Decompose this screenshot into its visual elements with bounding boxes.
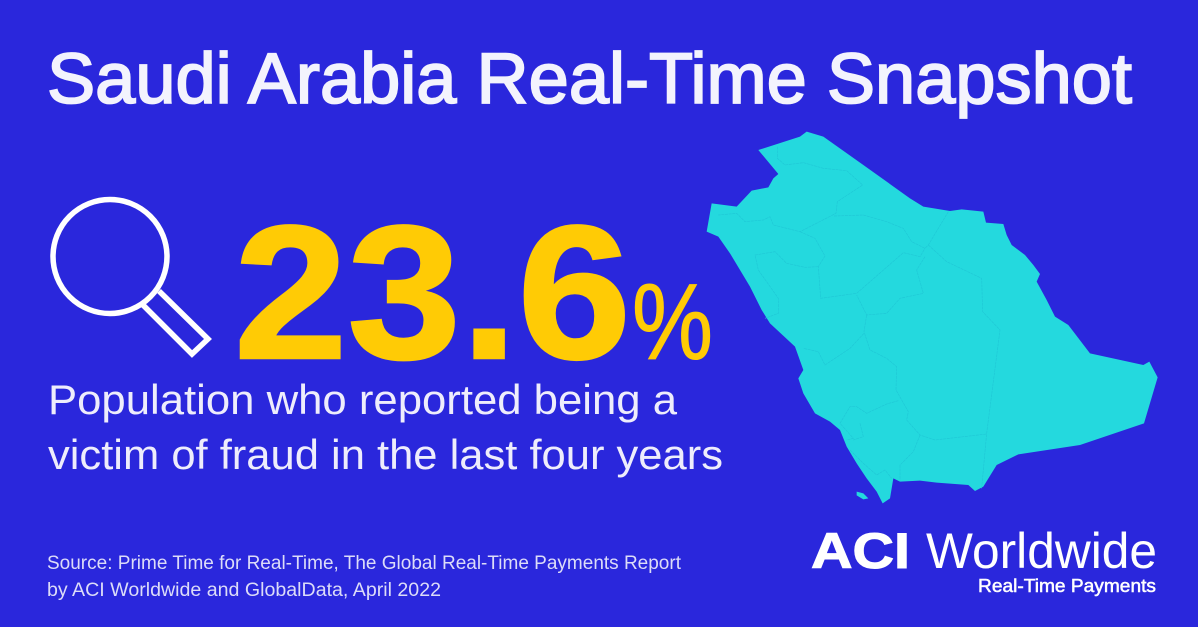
source note: Source: Prime Time for Real-Time, The Global Real-Time Payments Report: [47, 553, 682, 574]
description text: [48, 376, 723, 478]
big statistic: 23.6%: %: [632, 261, 713, 382]
logo: ACI Worldwide Real-Time Payments: Real-Time Payments: [978, 576, 1156, 596]
big statistic: 23.6%: 23.6: [234, 187, 631, 399]
source note: by ACI Worldwide and GlobalData, April 2022: [47, 580, 441, 601]
description text: victim of fraud in the last four years: [48, 431, 723, 478]
title: Saudi Arabia Real-Time Snapshot: [47, 40, 1132, 119]
logo: ACI Worldwide Real-Time Payments: [811, 523, 1157, 596]
icon: magnifying glass: [53, 200, 208, 354]
description text: Population who reported being a: [48, 376, 678, 423]
source note: [47, 553, 682, 601]
map: Saudi Arabia: [707, 132, 1158, 503]
logo: ACI Worldwide Real-Time Payments: ACI: [811, 523, 910, 579]
logo: ACI Worldwide Real-Time Payments: Worldwide: [926, 523, 1157, 579]
